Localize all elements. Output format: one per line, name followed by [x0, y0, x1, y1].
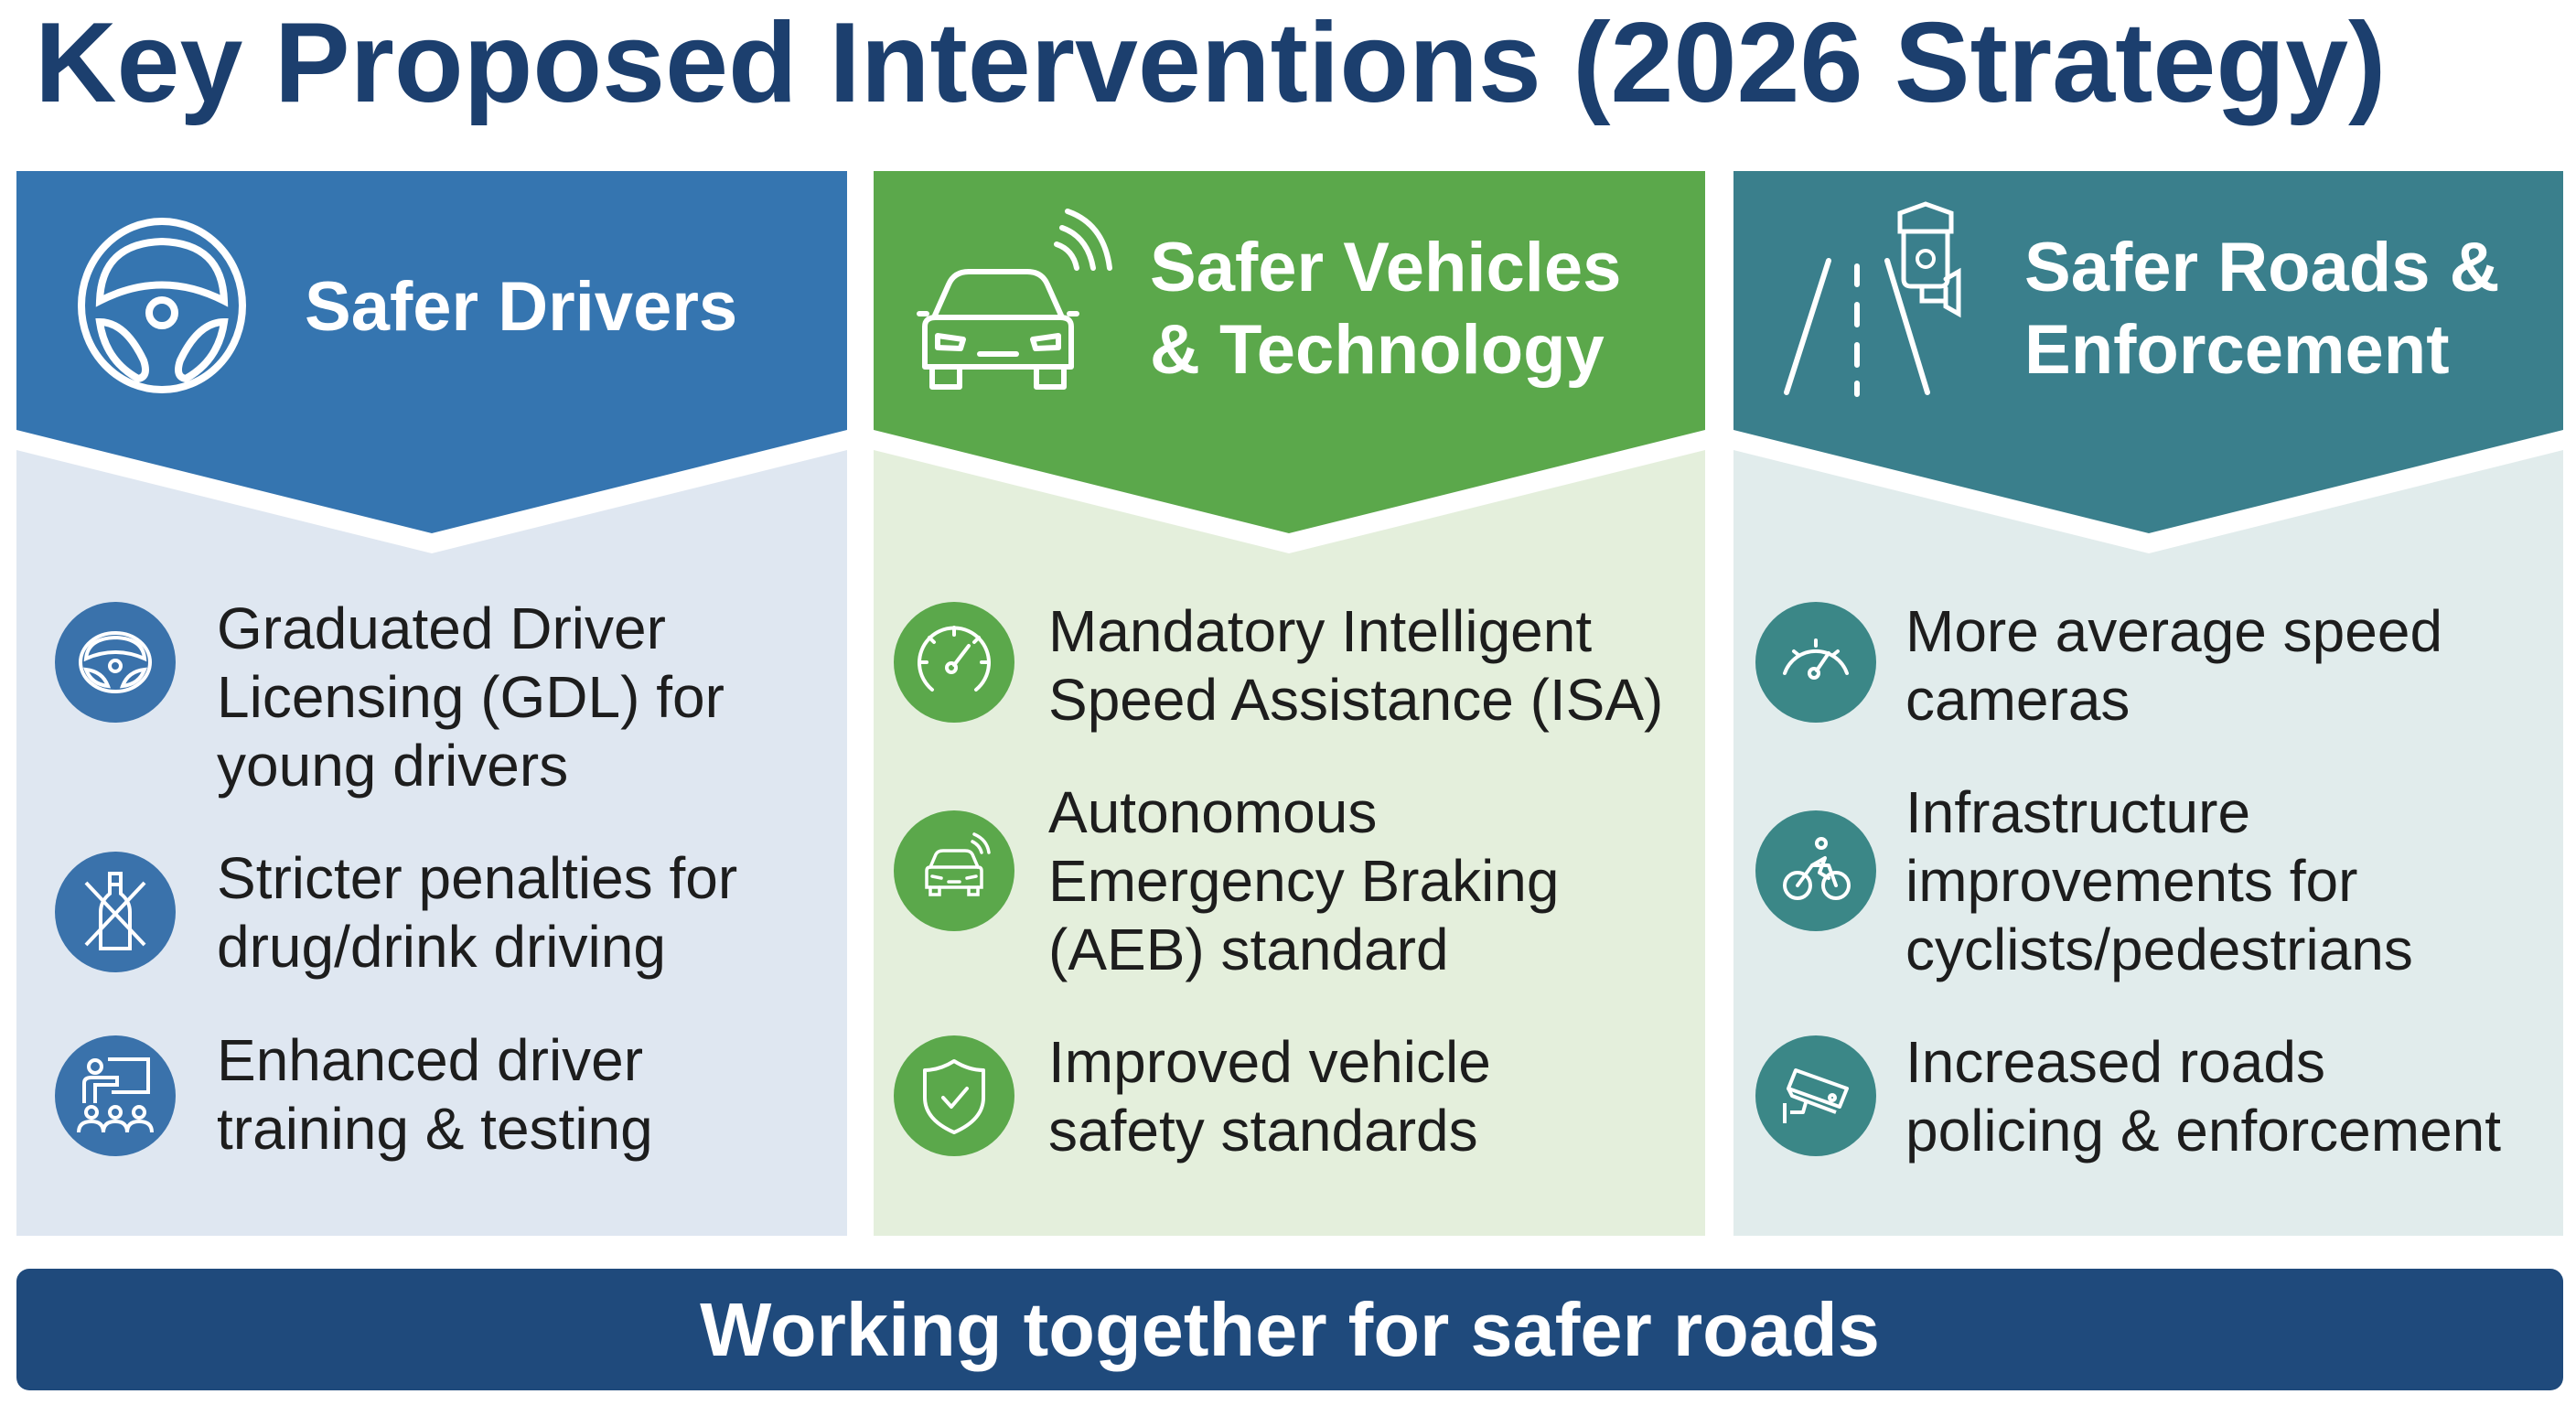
heading: safer roads: [2024, 229, 2499, 389]
text: GDL: Licensing (GDL) for: [217, 664, 724, 730]
text: policing: policing & enforcement: [1905, 1098, 2501, 1164]
icon: car signal: [894, 810, 1014, 931]
text: AEB: Autonomous: [1048, 779, 1377, 845]
text: training: [217, 1027, 653, 1162]
text: GDL: [217, 595, 724, 799]
text: ISA: Speed Assistance (ISA): [1048, 667, 1663, 733]
icon: speed camera gauge: [1755, 602, 1876, 723]
text: vehicle safety: Improved vehicle: [1048, 1029, 1491, 1095]
text: infrastructure: improvements for: [1905, 848, 2357, 914]
icon: road and camera: [1787, 204, 1959, 394]
footer banner: [16, 1269, 2563, 1390]
heading: safer vehicles: Safer Vehicles: [1150, 229, 1621, 306]
icon: training: [55, 1035, 176, 1156]
icon: cctv: [1755, 1035, 1876, 1156]
text: vehicle safety: [1048, 1029, 1491, 1164]
text: AEB: Emergency Braking: [1048, 848, 1559, 914]
text: policing: Increased roads: [1905, 1029, 2325, 1095]
text: penalties: drug/drink driving: [217, 914, 666, 980]
text: infrastructure: [1905, 779, 2413, 982]
title: Key Proposed Interventions (2026 Strategy): [35, 0, 2386, 126]
text: GDL: Graduated Driver: [217, 595, 666, 661]
text: training: Enhanced driver: [217, 1027, 643, 1093]
heading: safer roads: Safer Roads &: [2024, 229, 2499, 306]
heading: safer drivers: Safer Drivers: [305, 268, 737, 346]
text: penalties: [217, 845, 737, 980]
text: training: training & testing: [217, 1096, 653, 1162]
heading: safer vehicles: [1150, 229, 1621, 389]
icon: cyclist: [1755, 810, 1876, 931]
footer banner: Working together for safer roads: [700, 1287, 1880, 1372]
icon: shield: [894, 1035, 1014, 1156]
icon: speedometer: [894, 602, 1014, 723]
panel: safer drivers: [16, 171, 847, 1236]
text: AEB: [1048, 779, 1559, 982]
text: infrastructure: cyclists/pedestrians: [1905, 917, 2413, 982]
panel: safer vehicles: [874, 171, 1705, 1236]
icon: small steering wheel: [55, 602, 176, 723]
text: AEB: (AEB) standard: [1048, 917, 1449, 982]
heading: safer vehicles: & Technology: [1150, 311, 1605, 389]
text: penalties: Stricter penalties for: [217, 845, 737, 911]
text: average speed cameras: cameras: [1905, 667, 2130, 733]
text: vehicle safety: safety standards: [1048, 1098, 1478, 1164]
text: policing: [1905, 1029, 2501, 1164]
heading: safer roads: Enforcement: [2024, 311, 2450, 389]
icon: steering wheel: [81, 221, 242, 390]
panel: safer roads: [1733, 171, 2563, 1236]
text: ISA: [1048, 598, 1663, 733]
text: infrastructure: Infrastructure: [1905, 779, 2250, 845]
icon: no drink bottle: [55, 852, 176, 972]
text: average speed cameras: More average speed: [1905, 598, 2442, 664]
icon: car with signal: [919, 211, 1110, 387]
text: average speed cameras: [1905, 598, 2442, 733]
text: ISA: Mandatory Intelligent: [1048, 598, 1592, 664]
text: GDL: young drivers: [217, 733, 568, 799]
